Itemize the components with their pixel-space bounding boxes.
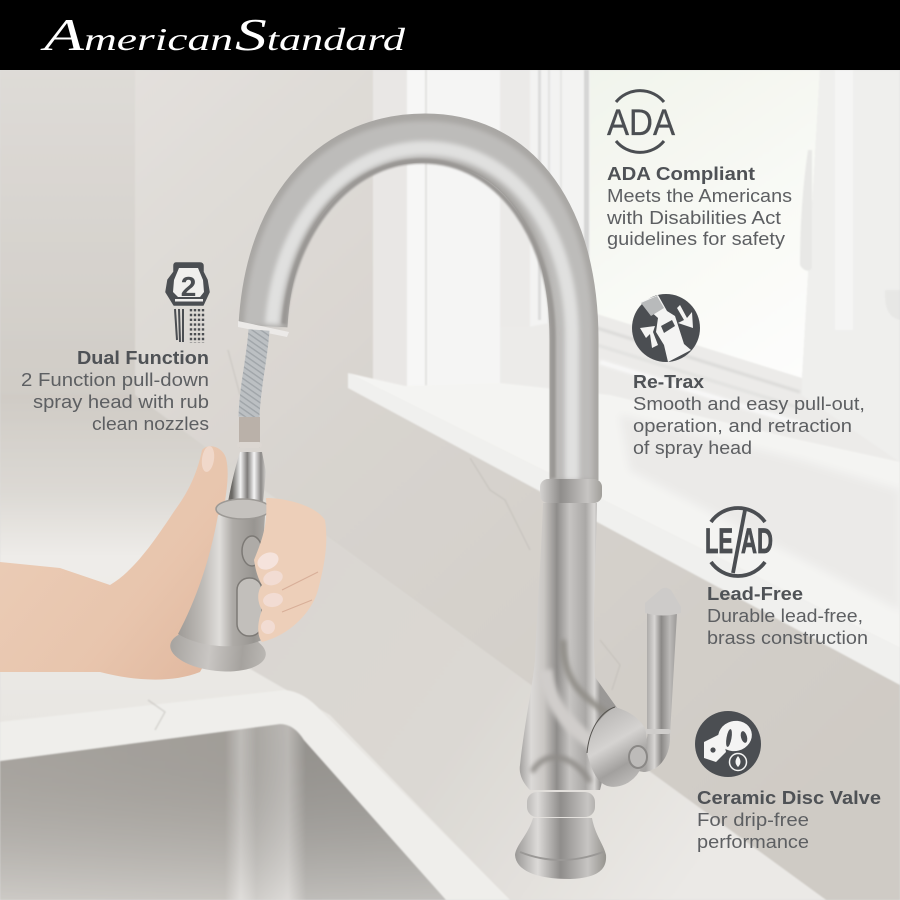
hose ferrule xyxy=(239,417,260,448)
description: brass construction xyxy=(707,628,868,648)
description xyxy=(606,186,792,249)
description: operation, and retraction xyxy=(633,416,852,436)
feature: ADA compliant xyxy=(606,91,792,249)
lower body xyxy=(520,503,620,790)
description: spray head with rub xyxy=(33,392,209,412)
description: of spray head xyxy=(633,438,752,458)
feature: lead-free xyxy=(705,508,868,648)
icon: lead crossed out: LE xyxy=(705,522,733,561)
icon: lead crossed out: AD xyxy=(741,522,773,561)
spout arc xyxy=(263,138,574,480)
window casing xyxy=(373,70,534,400)
feature: Re-Trax xyxy=(632,294,865,458)
description: 2 Function pull-down xyxy=(21,370,209,390)
spout tip rim xyxy=(238,321,289,337)
right wall and blind xyxy=(800,70,900,462)
description xyxy=(21,370,209,434)
feature: dual function xyxy=(21,263,209,434)
heading: Lead-Free xyxy=(707,584,803,604)
heading: Re-Trax xyxy=(633,372,704,392)
centre wall and backsplash xyxy=(135,70,900,900)
description: Durable lead-free, xyxy=(707,606,863,626)
description xyxy=(633,394,865,458)
large button xyxy=(237,578,262,636)
logo: S tandard xyxy=(235,9,406,60)
window glass xyxy=(590,70,820,380)
window sill xyxy=(348,373,900,685)
arm bend shading xyxy=(532,640,610,782)
icon: spray head with 2: 2 xyxy=(181,271,196,302)
description: with Disabilities Act xyxy=(606,208,781,228)
description: performance xyxy=(697,832,809,852)
hand: arm, palm and thumb xyxy=(0,446,240,680)
spray head base xyxy=(168,624,268,676)
description: clean nozzles xyxy=(92,414,209,434)
base xyxy=(515,792,606,879)
header band xyxy=(0,0,900,70)
small button xyxy=(242,536,262,566)
countertop right xyxy=(200,535,826,900)
feature: ceramic disc valve xyxy=(695,711,881,852)
description: Meets the Americans xyxy=(607,186,792,206)
icon: ADA xyxy=(607,91,675,152)
sink basin xyxy=(0,724,446,900)
fingers xyxy=(254,498,326,642)
icon: spray head with 2 xyxy=(166,263,209,343)
valve hub xyxy=(587,707,647,787)
countertop left of sink xyxy=(0,395,826,900)
spray head body xyxy=(178,515,265,646)
marble veins xyxy=(148,350,620,730)
left wall xyxy=(0,70,140,410)
description: Smooth and easy pull-out, xyxy=(633,394,865,414)
icon: ADA: ADA xyxy=(607,102,675,143)
icon: valve xyxy=(695,711,761,777)
description xyxy=(697,810,809,852)
heading: ADA Compliant xyxy=(607,164,755,184)
description: guidelines for safety xyxy=(607,229,785,249)
icon: lead crossed out xyxy=(705,508,773,576)
icon: retracting hose xyxy=(632,294,700,362)
window sash frames xyxy=(530,70,592,328)
spray head collar xyxy=(216,499,270,519)
lower window frame xyxy=(500,314,900,480)
heading: Dual Function xyxy=(77,348,209,368)
heading: Ceramic Disc Valve xyxy=(697,788,881,808)
chrome neck xyxy=(228,452,266,502)
hose xyxy=(249,330,259,417)
counter edge xyxy=(0,690,510,900)
hand and spray head xyxy=(0,330,326,680)
description xyxy=(707,606,868,648)
handle xyxy=(629,588,681,772)
description: For drip-free xyxy=(697,810,809,830)
faucet xyxy=(238,138,681,879)
logo xyxy=(40,9,406,60)
logo: A merican xyxy=(40,9,233,60)
collar xyxy=(540,479,602,503)
